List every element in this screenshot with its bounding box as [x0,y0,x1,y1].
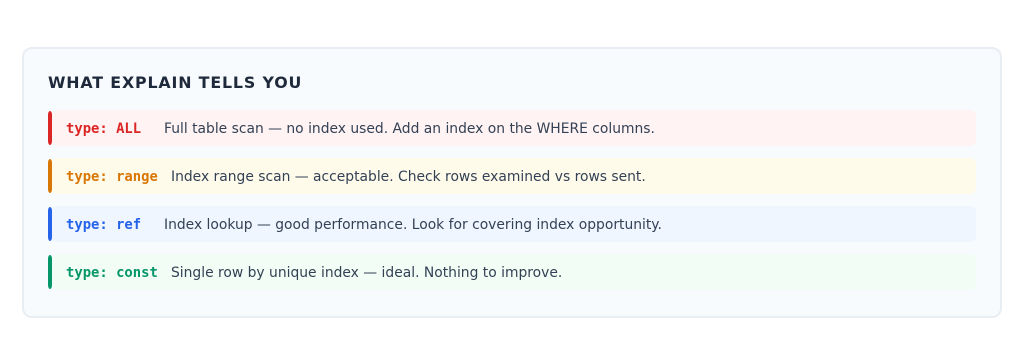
row: type ref [48,206,976,242]
panel: what EXPLAIN tells you [22,47,1002,318]
heading: WHAT EXPLAIN TELLS YOU [48,73,302,92]
label: type ref: type: ref [66,217,141,233]
description: type ref: Index lookup — good performance. Look for covering index opportunity. [164,217,662,233]
label: type range: type: range [66,169,158,185]
label: type const: type: const [66,265,158,281]
description: type const: Single row by unique index — ideal. Nothing to improve. [171,265,562,281]
row: type const [48,255,562,289]
label: type ALL: type: ALL [66,121,141,137]
row: type ALL [48,110,976,146]
description: type ALL: Full table scan — no index used. Add an index on the WHERE columns. [164,121,655,137]
description: type range: Index range scan — acceptable. Check rows examined vs rows sent. [171,169,646,185]
row: type range [48,158,976,194]
